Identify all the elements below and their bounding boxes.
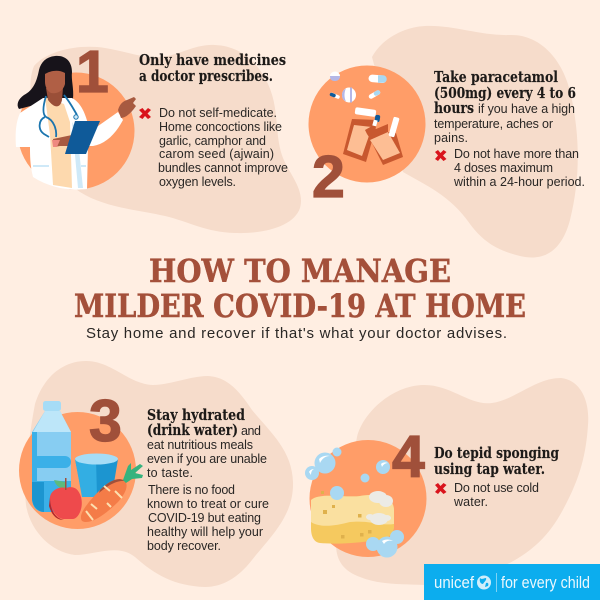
heading 4: Do tepid sponging	[434, 444, 559, 462]
icon: red cross 4	[435, 483, 446, 494]
text block 1: bundles cannot improve	[158, 161, 288, 175]
title: MILDER COVID-19 AT HOME	[74, 287, 526, 325]
text block 3 intro: and	[241, 424, 261, 438]
panel: step 4	[305, 378, 588, 585]
text block 2 warning: 4 doses maximum	[454, 161, 553, 175]
heading 2	[434, 68, 576, 117]
text block 3 intro: eat nutritious meals	[147, 438, 253, 452]
text block 3 note: healthy will help your	[147, 525, 263, 539]
text block 2 warning: within a 24-hour period.	[453, 175, 585, 189]
icon: water bottle, cup, apple and carrot	[32, 401, 143, 522]
text block 3 note: There is no food	[148, 483, 235, 497]
icon: sponge and bubbles	[305, 448, 404, 558]
text block 1: garlic, camphor and	[159, 134, 266, 148]
text block 2 intro	[434, 102, 575, 145]
text block 1: Do not self-medicate.	[159, 106, 277, 120]
text block 4: water.	[453, 495, 488, 509]
circle 3	[19, 412, 136, 529]
text block 3 note: body recover.	[147, 539, 221, 553]
text block 1	[158, 106, 288, 189]
text block 3 note: COVID-19 but eating	[148, 511, 261, 525]
icon: red cross 2	[435, 150, 446, 161]
text block 4: Do not use cold	[454, 481, 539, 495]
text block 3 intro	[147, 424, 267, 480]
text block 3 intro: to taste.	[147, 466, 193, 480]
heading 1: Only have medicines	[139, 51, 286, 69]
blob background 2	[372, 26, 578, 258]
heading 2: hours	[434, 99, 474, 117]
number 4: 4	[392, 424, 425, 490]
blob background 1	[30, 45, 301, 233]
blob background 3	[25, 361, 293, 587]
text block 3 note: known to treat or cure	[147, 497, 269, 511]
text block 2 intro: temperature, aches or	[434, 117, 553, 131]
text block 3 intro: even if you are unable	[147, 452, 267, 466]
logo: unicef for every child: unicef	[434, 573, 474, 592]
text block 2 warning	[453, 147, 585, 189]
circle 2	[308, 66, 426, 182]
heading 3: Stay hydrated	[147, 406, 245, 424]
icon: doctor	[16, 56, 136, 190]
logo: unicef for every child	[424, 564, 600, 600]
heading 2: Take paracetamol	[434, 68, 558, 86]
text block 1: oxygen levels.	[159, 175, 236, 189]
text block 3 note	[147, 483, 269, 553]
number 2: 2	[312, 144, 345, 210]
text block 1: carom seed (ajwain)	[159, 147, 274, 161]
heading 3	[147, 406, 245, 439]
text block 2 intro: if you have a high	[478, 102, 575, 116]
text block 1: Home concoctions like	[159, 120, 282, 134]
icon: pills and bottles	[330, 72, 403, 165]
circle 4	[310, 440, 426, 557]
heading 1: a doctor prescribes.	[139, 67, 273, 85]
text block 2 intro: pains.	[434, 131, 468, 145]
text block 4	[453, 481, 539, 509]
circle 1	[18, 72, 134, 190]
panel: step 1	[16, 39, 301, 233]
text block 2 warning: Do not have more than	[454, 147, 579, 161]
number 1: 1	[76, 39, 109, 105]
heading 3: (drink water)	[147, 421, 238, 439]
heading 1	[139, 51, 286, 85]
panel: step 2	[308, 26, 585, 258]
heading 4: using tap water.	[434, 460, 545, 478]
heading 4	[434, 444, 559, 478]
title	[74, 252, 526, 325]
number 3: 3	[89, 388, 122, 454]
blob background 4	[336, 378, 588, 585]
subtitle: Stay home and recover if that's what your doctor advises.	[86, 325, 507, 342]
title: HOW TO MANAGE	[149, 252, 451, 290]
icon: red cross 1	[139, 108, 151, 119]
panel: step 3	[19, 361, 293, 587]
